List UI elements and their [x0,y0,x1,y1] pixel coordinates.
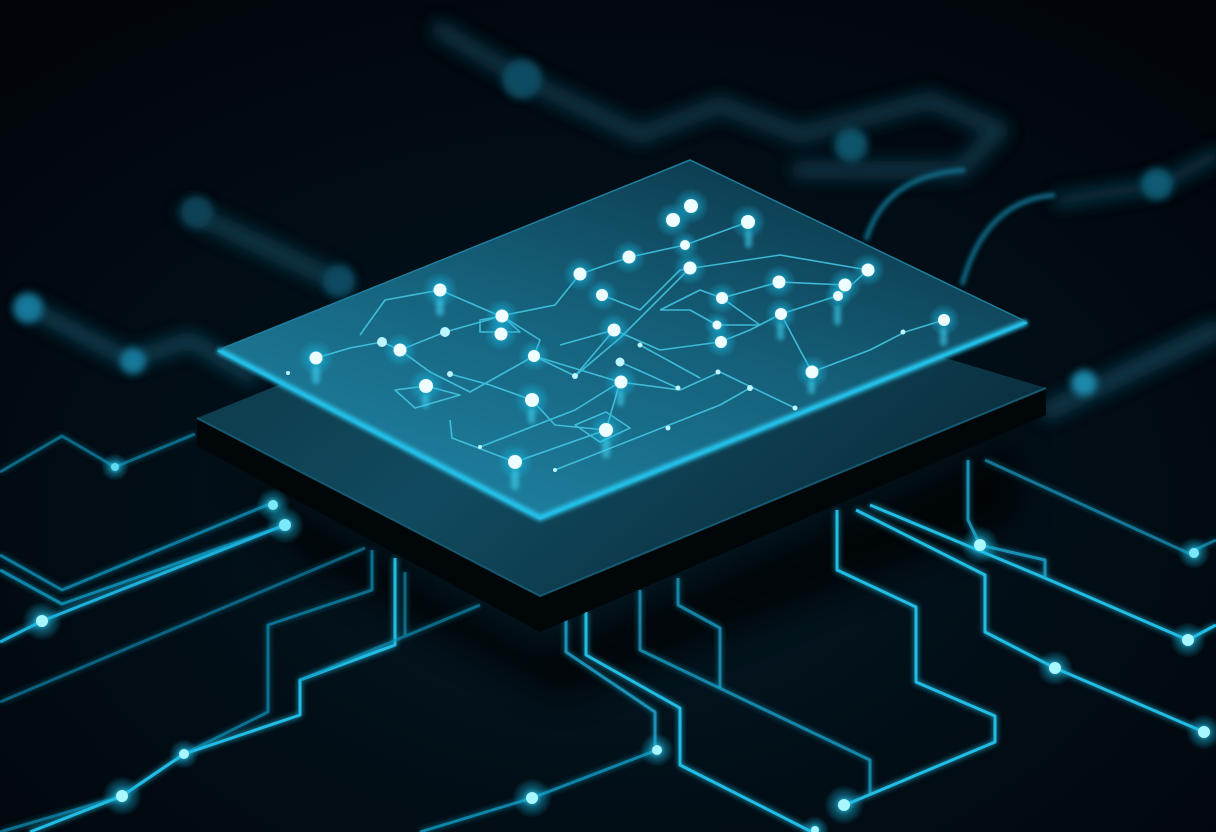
lower plate [197,255,1046,632]
ground nodes [22,453,1216,832]
shadow under plate [230,440,1020,700]
node reflections [312,230,947,490]
plate nodes [286,188,960,480]
left circuit traces [0,434,657,832]
centre and right circuit traces [566,460,1216,832]
blurred distant traces [30,30,1216,410]
top glass plate [218,160,1027,518]
blurred background nodes [13,59,1173,396]
plate circuit traces [316,222,944,470]
blurred arcs [866,170,1055,285]
